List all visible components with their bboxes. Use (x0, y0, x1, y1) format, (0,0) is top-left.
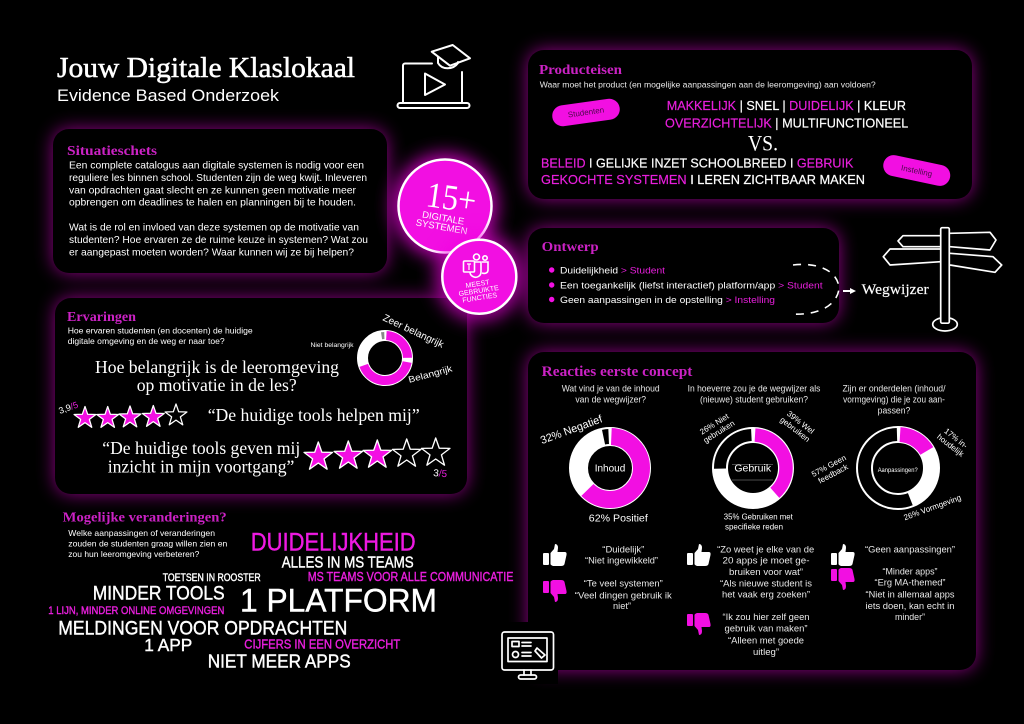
text block: situation: reguliere les binnen school. Studenten zijn de weg kwijt. Inleveren (69, 172, 367, 184)
question 3 (842, 384, 946, 416)
rating: 3,9 of 5: 3,9/5 (57, 400, 80, 416)
badge: 15+ digitale systemen (393, 154, 497, 258)
text block: question: zouden de studenten graag willen zien en (68, 538, 228, 548)
text: student requirements: OVERZICHTELIJK | MULTIFUNCTIONEEL (665, 115, 908, 130)
text block: situation: er aangepast moeten worden? Waar kunnen wij ze bij helpen? (69, 246, 354, 258)
question 1 (562, 384, 660, 405)
donut chart: Gebruik: Gebruik (734, 462, 772, 474)
bullet list (549, 266, 823, 306)
word cloud: MINDER TOOLS (93, 583, 225, 604)
heading: Reacties eerste concept: Reacties eerste concept (542, 364, 692, 380)
heading: Producteisen: Producteisen (539, 63, 622, 78)
quote: inzicht: “De huidige tools geven mij (102, 438, 300, 458)
word cloud (48, 529, 513, 672)
donut chart: Aanpassingen (864, 434, 932, 502)
text: student requirements (665, 98, 908, 130)
quotes: negative 2: “Ik zou hier zelf geen (722, 612, 810, 622)
donut labels: Niet belangrijk (310, 343, 355, 349)
quote: inzicht: inzicht in mijn voortgang” (108, 456, 294, 476)
badge: meest gebruikte functies: GEBRUIKTE (458, 285, 500, 298)
pill: Instelling: Instelling (900, 163, 933, 179)
quotes: positive 2 (717, 544, 814, 600)
question 3: Zijn er onderdelen (inhoud/ (842, 384, 946, 394)
donut labels: Zeer belangrijk (381, 313, 446, 351)
text block: intro: Hoe ervaren studenten (en docenten) de huidige (68, 326, 253, 336)
word cloud: MELDINGEN VOOR OPDRACHTEN (58, 618, 347, 639)
quotes: negative 3: minder” (895, 612, 925, 622)
bullet list: Duidelijkheid > Student (560, 266, 665, 276)
donut labels (310, 313, 454, 385)
icon: thumb up 1 (543, 544, 567, 566)
icon: Teams logo (464, 254, 488, 277)
quotes: negative 3: iets doen, kan echt in (866, 601, 954, 611)
question 2: In hoeverre zou je de wegwijzer als (688, 384, 821, 394)
icon: laptop with graduation cap (398, 45, 470, 108)
icon: thumb down 3 (831, 568, 855, 590)
icon: thumb up 2 (687, 544, 711, 566)
heading: Situatieschets: Situatieschets (67, 143, 157, 158)
text: student requirements: MAKKELIJK | SNEL | DUIDELIJK | KLEUR (667, 98, 906, 113)
panel: Ervaringen (55, 298, 467, 494)
quotes: negative 1 (575, 579, 672, 611)
quotes: positive 1: “Niet ingewikkeld” (585, 556, 658, 566)
labels: Aanpassingen: 57% Geen (810, 453, 848, 479)
text block: situation: Een complete catalogus aan digitale systemen is nodig voor een (69, 160, 364, 172)
quotes: positive 2: “Zo weet je elke van de (717, 544, 814, 554)
quotes: positive 2: 20 apps je moet ge- (722, 556, 810, 566)
quotes: positive 2: bruiken voor wat” (729, 567, 803, 577)
text block: intro (68, 326, 253, 346)
arrow: dashed curve to Wegwijzer (790, 264, 856, 314)
pill: Studenten (551, 97, 621, 128)
title block: Evidence Based Onderzoek (57, 86, 280, 105)
heading: Mogelijke veranderingen: Mogelijke veranderingen? (63, 511, 227, 526)
quotes: positive 2: het vaak erg zoeken” (722, 590, 810, 600)
labels: Aanpassingen: 17% in- (942, 426, 970, 450)
badge: 15+ digitale systemen: DIGITALE (421, 209, 465, 228)
text block: intro: digitale omgeving en de weg er naar toe? (68, 336, 225, 346)
word cloud: 1 APP (144, 635, 192, 655)
quotes: negative 3: “Erg MA-themed” (874, 578, 946, 588)
panel: Situatieschets (53, 129, 387, 273)
heading: Ontwerp: Ontwerp (542, 240, 599, 255)
panel: Producteisen (528, 50, 972, 199)
text block: situation: studenten? Hoe ervaren ze de ruime keuze in systemen? Wat zou (69, 234, 368, 246)
badge: meest gebruikte functies: MEEST (465, 279, 491, 290)
donut chart: belang (362, 336, 408, 380)
word cloud: DUIDELIJKHEID (251, 529, 416, 557)
text block: question: Welke aanpassingen of veranderingen (68, 528, 215, 538)
badge: 15+ digitale systemen: SYSTEMEN (415, 218, 468, 237)
text block: situation (69, 160, 368, 258)
quotes: negative 3 (866, 566, 955, 622)
text block: situation: opbrengen om deadlines te halen en planningen bij te houden. (69, 196, 356, 208)
labels: Inhoud (539, 413, 648, 524)
word cloud: 1 LIJN, MINDER ONLINE OMGEVINGEN (48, 605, 224, 617)
question: op motivatie in de les? (137, 375, 297, 395)
rating: 3 of 5: 3/5 (433, 468, 448, 480)
labels: Gebruik: 35% Gebruiken met (724, 512, 794, 522)
donut chart: Inhoud (578, 436, 642, 500)
quotes: negative 2: uitleg” (753, 647, 779, 657)
panel: Ontwerp (528, 228, 839, 323)
text: institution requirements (541, 155, 865, 187)
text: VS.: VS. (748, 131, 778, 156)
quotes: negative 1: “Te veel systemen” (584, 579, 663, 589)
donut labels: Belangrijk (407, 363, 454, 385)
word cloud: MS TEAMS VOOR ALLE COMMUNICATIE (308, 570, 513, 584)
quote: inzicht (102, 438, 300, 476)
quote: positive 3: “Geen aanpassingen” (865, 544, 955, 554)
question 3: vormgeving) die je zou aan- (843, 395, 945, 405)
bullet list: Een toegankelijk (liefst interactief) platform/app > Student (560, 280, 823, 292)
quotes: positive 1: “Duidelijk” (602, 544, 644, 554)
heading: Ervaringen: Ervaringen (67, 309, 137, 324)
quotes: positive 2: “Als nieuwe student is (720, 579, 813, 589)
quotes: negative 2 (722, 612, 810, 657)
text block: situation: Wat is de rol en invloed van deze systemen op de motivatie van (69, 222, 359, 234)
text: institution requirements: GEKOCHTE SYSTEMEN I LEREN ZICHTBAAR MAKEN (541, 172, 865, 187)
labels: Aanpassingen: feedback (817, 462, 850, 486)
text block: question: zou hun leeromgeving verbeteren? (68, 549, 200, 559)
quote: helpen: “De huidige tools helpen mij” (208, 405, 420, 425)
word cloud: NIET MEER APPS (208, 652, 351, 672)
labels: Gebruik: specifieke reden (725, 522, 783, 532)
donut chart: Aanpassingen: Aanpassingen? (878, 467, 918, 474)
quotes: negative 2: gebruik van maken” (724, 623, 808, 633)
section: Mogelijke veranderingen (48, 511, 513, 672)
title block: Jouw Digitale Klaslokaal (57, 53, 355, 84)
quotes: positive 1 (585, 544, 658, 566)
quotes: negative 3: “Niet in allemaal apps (866, 590, 955, 600)
stars: row 2 (304, 438, 450, 469)
donut chart: Inhoud: Inhoud (595, 464, 625, 474)
labels: Aanpassingen (810, 425, 972, 522)
panel: Reacties eerste concept (528, 352, 976, 670)
word cloud: ALLES IN MS TEAMS (282, 555, 414, 572)
pill: Instelling (881, 153, 952, 188)
labels: Inhoud: 62% Positief (589, 512, 648, 524)
pill: Studenten: Studenten (567, 106, 605, 119)
stars: row 1 (74, 404, 187, 427)
word cloud: TOETSEN IN ROOSTER (163, 572, 261, 584)
labels: Gebruik (697, 408, 817, 532)
quotes: negative 2: “Alleen met goede (728, 635, 804, 645)
icon: signpost (883, 228, 1002, 331)
labels: Inhoud: 32% Negatief (539, 413, 605, 447)
text block: intro: Waar moet het product (en mogelijke aanpassingen aan de leeromgeving) aan voldoen? (540, 79, 876, 89)
labels: Gebruik: gebruiken (702, 419, 736, 445)
quotes: negative 1: “Veel dingen gebruik ik (575, 590, 672, 600)
question 3: passen? (878, 406, 910, 416)
labels: Aanpassingen: 26% Vormgeving (902, 493, 962, 522)
text: institution requirements: BELEID I GELIJKE INZET SCHOOLBREED I GEBRUIK (541, 155, 854, 170)
word cloud: 1 PLATFORM (240, 583, 437, 619)
question (95, 357, 339, 395)
quotes: negative 3: “Minder apps” (882, 566, 938, 576)
donut chart: Gebruik (720, 435, 786, 501)
labels: Gebruik: gebruiken (778, 415, 812, 444)
badge: 15+ digitale systemen: 15+ (424, 174, 479, 221)
badge: meest gebruikte functies (435, 233, 523, 321)
quotes: negative 1: niet” (613, 601, 631, 611)
question 1: van de wegwijzer? (575, 395, 646, 405)
icon: monitor with checklist (490, 622, 558, 684)
question 1: Wat vind je van de inhoud (562, 384, 660, 394)
labels: Gebruik: 39% Wel (785, 409, 816, 436)
title block (57, 53, 355, 105)
text block: question (68, 528, 228, 559)
question 2 (688, 384, 821, 405)
bullet list: Geen aanpassingen in de opstelling > Instelling (560, 295, 775, 306)
icon: thumb up 3 (831, 544, 855, 566)
icon: thumb down 2 (687, 613, 711, 635)
question: Hoe belangrijk is de leeromgeving (95, 357, 339, 377)
label: Wegwijzer: Wegwijzer (862, 282, 929, 298)
icon: thumb down 1 (543, 580, 567, 602)
word cloud: CIJFERS IN EEN OVERZICHT (244, 637, 400, 652)
badge: meest gebruikte functies: FUNCTIES (462, 292, 498, 305)
question 2: (nieuwe) student gebruiken? (700, 395, 808, 405)
labels: Gebruik: 26% Niet (698, 411, 731, 437)
text block: situation: van opdrachten gaat slecht en ze kunnen geen motivatie meer (69, 184, 356, 196)
labels: Aanpassingen: houdelijk (935, 432, 966, 459)
